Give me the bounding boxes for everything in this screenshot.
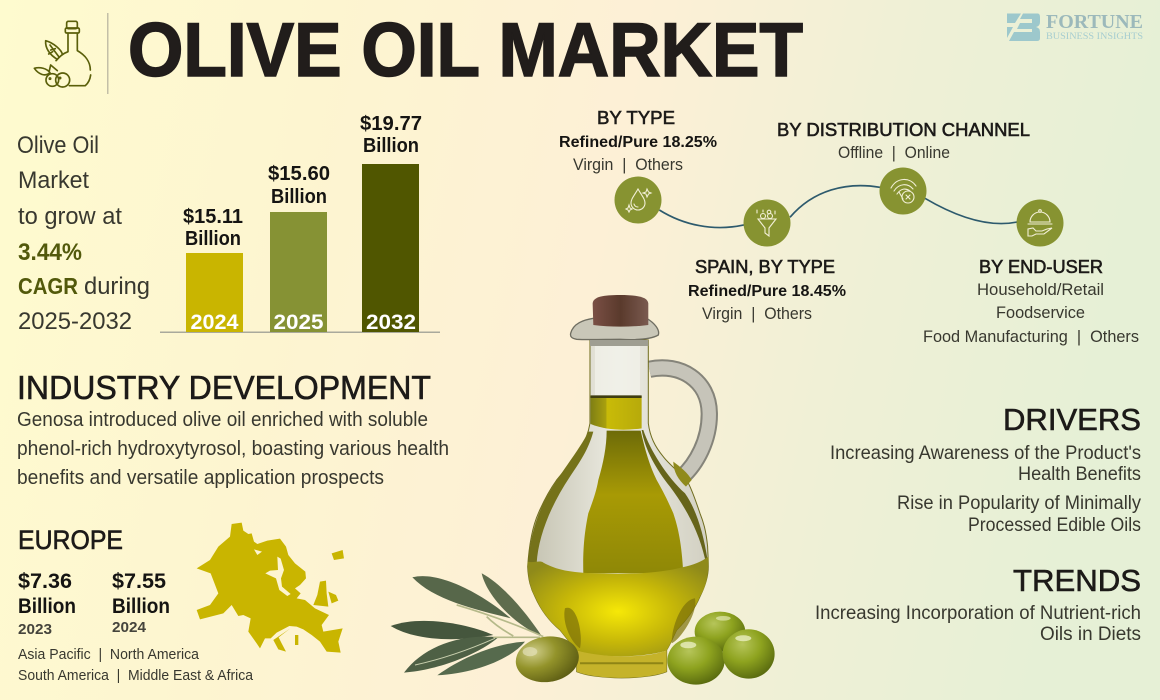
heading: Europe: EUROPE xyxy=(18,525,123,555)
glass reflections over body xyxy=(528,432,593,567)
text block: trends: Oils in Diets xyxy=(1040,624,1141,645)
bar 2025: Billion xyxy=(271,185,327,208)
icon: funnel xyxy=(744,200,790,246)
logo: Fortune Business Insights: BUSINESS INSIGHTS xyxy=(1046,32,1143,42)
text block: industry development: Genosa introduced olive oil enriched with soluble xyxy=(17,409,428,431)
text block: market growth: during xyxy=(84,273,150,300)
text block: industry development: phenol-rich hydroxytyrosol, boasting various health xyxy=(17,438,449,460)
stat: Europe 2023: 2023 xyxy=(18,621,52,638)
segment: by end-user: BY END-USER xyxy=(979,256,1103,277)
segment: by distribution channel: Offline | Online xyxy=(838,143,950,162)
bar 2025: $15.60 xyxy=(268,162,330,185)
logo: Fortune Business Insights: FORTUNE xyxy=(1046,11,1143,33)
text block: market growth: 2025-2032 xyxy=(18,308,132,335)
bar 2032: 2032 xyxy=(366,310,416,334)
segment: Spain by type xyxy=(688,256,846,323)
bar 2032: Billion xyxy=(363,134,419,157)
segment: by distribution channel xyxy=(777,119,1030,162)
bar 2024: 2024 xyxy=(190,310,239,334)
bar 2032 xyxy=(360,112,422,334)
icon: serving cloche xyxy=(1016,200,1064,246)
segment: by type: Refined/Pure 18.25% xyxy=(559,134,717,151)
text block: market growth: CAGR xyxy=(18,273,78,299)
bar 2024: Billion xyxy=(185,227,241,250)
jug glass xyxy=(528,340,708,678)
icon: oil drop xyxy=(614,176,662,224)
handle xyxy=(649,368,709,477)
text block: trends xyxy=(815,603,1141,645)
stat: Europe 2024: $7.55 xyxy=(112,570,166,593)
segment: by end-user: Foodservice xyxy=(996,303,1085,322)
segment: Spain by type: Refined/Pure 18.45% xyxy=(688,283,846,300)
leaves xyxy=(391,573,543,675)
stat: Europe 2023 xyxy=(18,570,76,638)
text block: other regions xyxy=(18,646,254,684)
neck oil xyxy=(591,396,642,430)
stat: Europe 2024 xyxy=(112,570,170,636)
bar 2032: $19.77 xyxy=(360,112,422,135)
handle base xyxy=(673,462,692,487)
connector curves xyxy=(659,186,1017,228)
text block: industry development xyxy=(17,409,449,489)
text block: drivers: Processed Edible Oils xyxy=(968,515,1141,536)
text block: other regions: South America | Middle East & Africa xyxy=(18,667,254,684)
text block: market growth: Olive Oil xyxy=(17,132,99,159)
segment: Spain by type: SPAIN, BY TYPE xyxy=(695,256,835,277)
title: OLIVE OIL MARKET xyxy=(128,8,803,93)
bar 2024 xyxy=(183,205,243,334)
segment: by end-user: Household/Retail xyxy=(977,280,1104,299)
icon: olive oil bottle outline xyxy=(34,21,91,87)
logo: Fortune Business Insights xyxy=(1007,11,1143,42)
lower oil xyxy=(528,557,708,656)
central oil xyxy=(583,431,683,573)
stat: Europe 2024: 2024 xyxy=(112,619,147,636)
text block: industry development: benefits and versatile application prospects xyxy=(17,467,384,489)
icon: distribution channel xyxy=(880,168,926,214)
stat: Europe 2023: Billion xyxy=(18,595,76,618)
text block: other regions: Asia Pacific | North America xyxy=(18,646,200,663)
segment: by end-user xyxy=(923,256,1139,346)
segment: Spain by type: Virgin | Others xyxy=(702,304,812,323)
segment: by end-user: Food Manufacturing | Others xyxy=(923,327,1139,346)
text block: market growth xyxy=(17,132,150,335)
text block: trends: Increasing Incorporation of Nutrient-rich xyxy=(815,603,1141,624)
olives xyxy=(513,612,775,686)
text block: market growth: Market xyxy=(18,167,89,194)
segment: by distribution channel: BY DISTRIBUTION CHANNEL xyxy=(777,119,1030,140)
heading: industry development: INDUSTRY DEVELOPMENT xyxy=(17,369,431,406)
text block: drivers xyxy=(830,443,1141,536)
heading: trends: TRENDS xyxy=(1013,563,1141,598)
heading: drivers: DRIVERS xyxy=(1003,402,1141,437)
stat: Europe 2024: Billion xyxy=(112,595,170,618)
text block: market growth: 3.44% xyxy=(18,239,82,266)
divider xyxy=(107,13,108,94)
text block: drivers: Health Benefits xyxy=(1018,464,1141,485)
bar chart xyxy=(160,112,440,334)
text block: market growth: to grow at xyxy=(18,203,122,230)
illustration: olive oil jug with olives and leaves xyxy=(391,295,775,686)
text block: drivers: Rise in Popularity of Minimally xyxy=(897,493,1141,514)
segment: by type: BY TYPE xyxy=(597,107,675,128)
segment: by type: Virgin | Others xyxy=(573,155,683,174)
map: Europe xyxy=(197,523,344,653)
text block: drivers: Increasing Awareness of the Product's xyxy=(830,443,1141,464)
bar 2025 xyxy=(268,162,330,334)
stat: Europe 2023: $7.36 xyxy=(18,570,72,593)
cork xyxy=(593,295,648,327)
bar 2025: 2025 xyxy=(274,310,324,334)
segment: by type xyxy=(559,107,717,174)
base xyxy=(577,651,667,678)
lip xyxy=(571,318,659,340)
bar 2024: $15.11 xyxy=(183,205,243,228)
